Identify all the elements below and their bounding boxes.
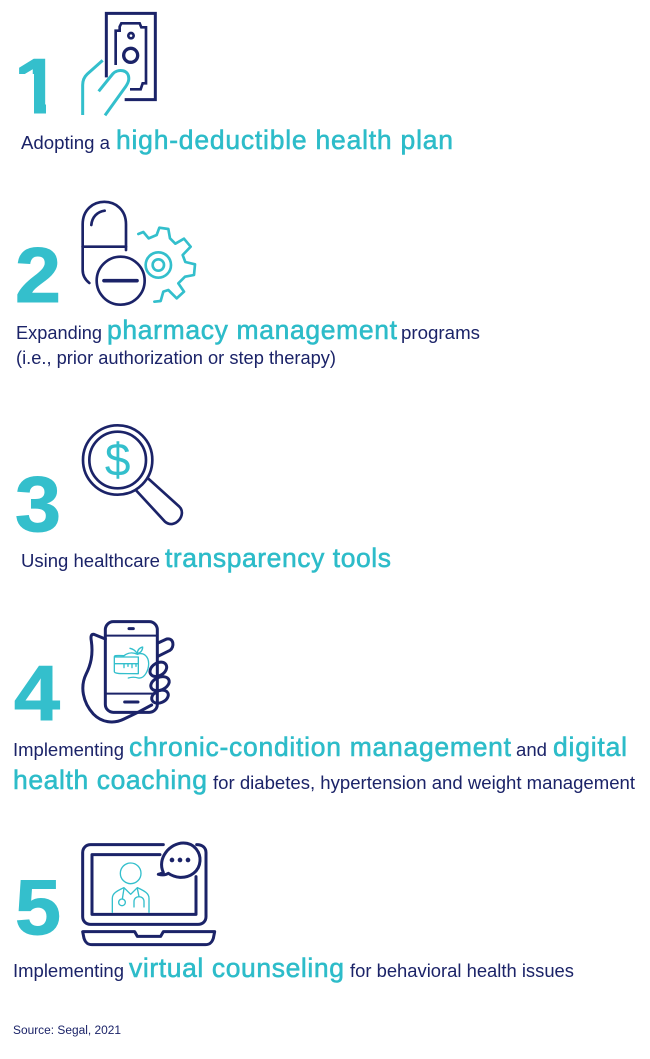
caption 3: Using healthcare [21, 551, 160, 571]
caption 5: Implementing [13, 961, 124, 981]
icon: pill and gear [83, 202, 195, 305]
caption 4: health coaching [13, 765, 207, 795]
panel: item 2 [15, 202, 480, 368]
caption 2: (i.e., prior authorization or step therapy) [16, 348, 336, 368]
caption 2 [16, 315, 480, 368]
caption 3: transparency tools [165, 543, 391, 573]
caption 2: Expanding [16, 323, 102, 343]
icon: hand holding phone with apple and tape measure [83, 622, 173, 722]
caption 2: pharmacy management [107, 315, 398, 345]
panel: item 5 [13, 843, 574, 983]
number 5: 5 [15, 863, 61, 951]
panel: item 4 [13, 622, 635, 795]
caption 3 [21, 543, 391, 573]
caption 4: Implementing [13, 740, 124, 760]
caption 5: virtual counseling [129, 953, 344, 983]
number 2: 2 [15, 231, 61, 319]
panel: item 3 [15, 425, 391, 573]
icon: hand holding dollar bill [83, 13, 155, 115]
icon: laptop with doctor and speech bubble [83, 843, 215, 945]
caption 4: digital [553, 732, 627, 762]
caption 5: for behavioral health issues [350, 961, 574, 981]
caption 5 [13, 953, 574, 983]
number 4: 4 [14, 649, 60, 737]
panel: item 1 [14, 13, 453, 155]
dollar sign: $ [105, 434, 130, 486]
caption 4 [13, 732, 635, 795]
caption 2: programs [401, 323, 480, 343]
caption 1: Adopting a [21, 133, 111, 153]
source note: Source: Segal, 2021 [13, 1025, 121, 1037]
number 1: 1 [14, 42, 60, 130]
icon: magnifying glass with dollar [83, 425, 182, 524]
caption 4: chronic-condition management [129, 732, 512, 762]
caption 1: high-deductible health plan [116, 125, 453, 155]
caption 4: for diabetes, hypertension and weight management [213, 773, 635, 793]
number 3: 3 [15, 460, 61, 548]
caption 4: and [516, 740, 547, 760]
